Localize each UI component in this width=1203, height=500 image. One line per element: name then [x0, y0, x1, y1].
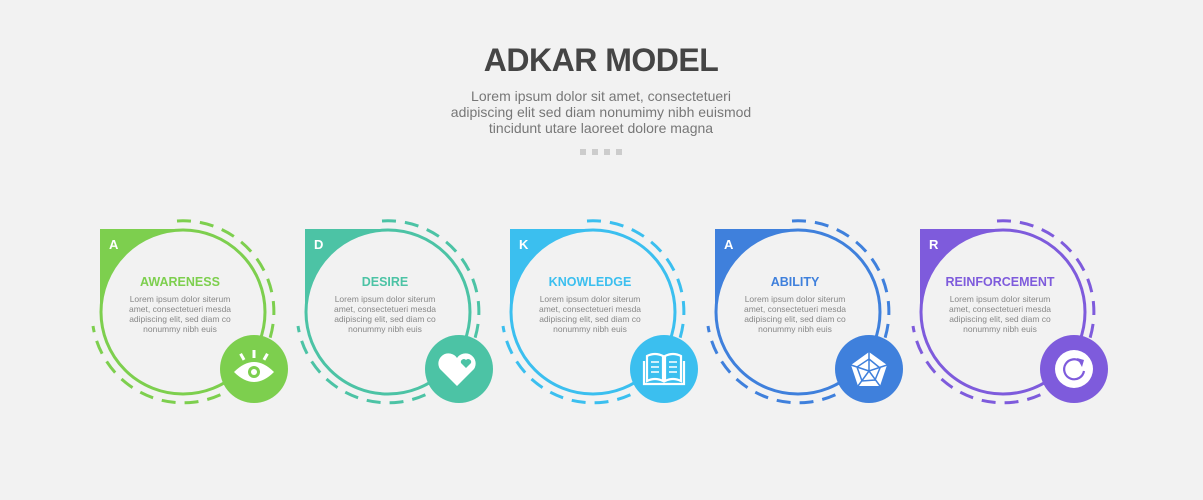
step: reinforcement: REINFORCEMENT: [945, 275, 1055, 289]
step: awareness: nonummy nibh euis: [143, 324, 217, 334]
step: reinforcement: Lorem ipsum dolor siterum: [950, 294, 1050, 304]
subtitle: tincidunt utare laoreet dolore magna: [489, 120, 713, 136]
step: reinforcement: [913, 221, 1108, 403]
step: awareness: AWARENESS: [140, 275, 220, 289]
step: knowledge: K: [519, 237, 529, 252]
step: reinforcement: adipiscing elit, sed diam co: [949, 314, 1051, 324]
subtitle: [451, 88, 751, 136]
step: desire: [298, 221, 493, 403]
step: reinforcement: R: [929, 237, 939, 252]
step: ability: ABILITY: [771, 275, 820, 289]
subtitle: Lorem ipsum dolor sit amet, consectetueri: [471, 88, 731, 104]
step: ability: amet, consectetueri mesda: [744, 304, 846, 314]
step: desire: D: [314, 237, 323, 252]
step: desire: DESIRE: [362, 275, 408, 289]
step: knowledge: KNOWLEDGE: [549, 275, 631, 289]
step: awareness: adipiscing elit, sed diam co: [129, 314, 231, 324]
step: knowledge: adipiscing elit, sed diam co: [539, 314, 641, 324]
step: awareness: A: [109, 237, 119, 252]
title: ADKAR MODEL: [484, 42, 718, 78]
step: desire: nonummy nibh euis: [348, 324, 422, 334]
step: awareness: amet, consectetueri mesda: [129, 304, 231, 314]
step: ability: adipiscing elit, sed diam co: [744, 314, 846, 324]
step: reinforcement: amet, consectetueri mesda: [949, 304, 1051, 314]
step: ability: Lorem ipsum dolor siterum: [745, 294, 845, 304]
step: knowledge: amet, consectetueri mesda: [539, 304, 641, 314]
step: awareness: Lorem ipsum dolor siterum: [130, 294, 230, 304]
dots: [580, 149, 622, 155]
step: knowledge: Lorem ipsum dolor siterum: [540, 294, 640, 304]
step: knowledge: nonummy nibh euis: [553, 324, 627, 334]
step: desire: adipiscing elit, sed diam co: [334, 314, 436, 324]
step: awareness: [93, 221, 288, 403]
step: reinforcement: nonummy nibh euis: [963, 324, 1037, 334]
subtitle: adipiscing elit sed diam nonumimy nibh euismod: [451, 104, 751, 120]
step: knowledge: [503, 221, 698, 403]
step: desire: amet, consectetueri mesda: [334, 304, 436, 314]
step: desire: Lorem ipsum dolor siterum: [335, 294, 435, 304]
step: ability: A: [724, 237, 734, 252]
step: ability: [708, 221, 903, 403]
step: ability: nonummy nibh euis: [758, 324, 832, 334]
